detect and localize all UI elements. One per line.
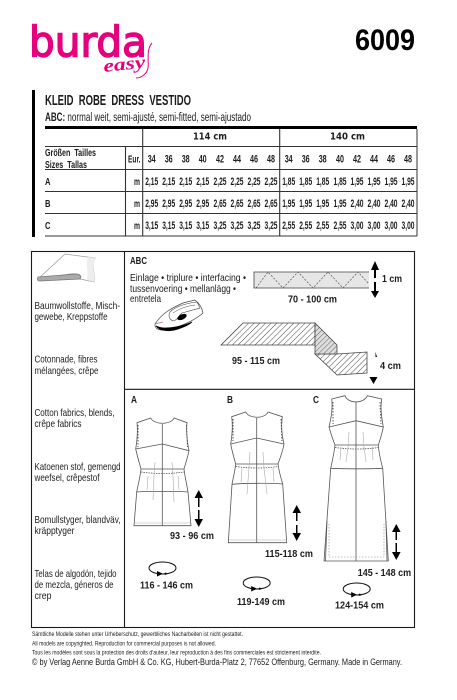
fabric recommendations: crep: [34, 591, 52, 602]
row C: 3,25: [230, 220, 244, 232]
dress A: A: [131, 394, 137, 406]
dress B: B: [227, 394, 233, 406]
yardage table: [45, 126, 417, 236]
interfacing strip diagram: [254, 272, 369, 288]
bias tape diagram: [221, 323, 367, 375]
copyright notice: Sämtliche Modelle stehen unter Urheberschutz, gewerbliches Nacharbeiten ist nicht gestattet.: [32, 631, 243, 638]
fabric recommendations: Cotonnade, fibres: [34, 354, 98, 366]
dress B: [227, 394, 287, 543]
size row: 42: [353, 154, 361, 166]
fabric recommendations: [34, 301, 121, 602]
arrow: B length: [292, 505, 301, 541]
row A: 2,25: [248, 176, 260, 188]
row B: 1,95: [299, 198, 312, 210]
size row: 36: [165, 154, 173, 166]
row C: 2,55: [334, 220, 346, 232]
fabric recommendations: weefsel, crêpestof: [34, 473, 100, 484]
row A: [45, 176, 414, 188]
fabric recommendations: Baumwollstoffe, Misch-: [34, 301, 120, 312]
size row: 48: [267, 154, 275, 166]
title: KLEID ROBE DRESS VESTIDO: [45, 92, 191, 109]
row A: 2,15: [196, 176, 209, 188]
row B: 2,65: [264, 198, 278, 210]
row B: 2,40: [350, 198, 364, 210]
icon: C hip circumference: [343, 583, 370, 598]
row B: 2,95: [145, 198, 158, 210]
row C: 3,15: [179, 220, 192, 232]
row B: 2,65: [214, 198, 226, 210]
row C: C: [45, 220, 51, 232]
logo: burda easy: easy: [102, 52, 148, 76]
size labels: Eur.: [128, 154, 141, 166]
row B: m: [134, 198, 140, 210]
label: A length: 93 - 96 cm: [170, 531, 214, 542]
size row: 38: [319, 154, 327, 166]
size row: 34: [148, 154, 156, 166]
size row: 48: [404, 154, 412, 166]
row A: 2,15: [162, 176, 175, 188]
row A: 2,25: [214, 176, 226, 188]
size row: 44: [233, 154, 242, 166]
size row: 40: [336, 154, 344, 166]
copyright notice: [32, 631, 402, 667]
interfacing text: tussenvoering • mellanlägg •: [130, 284, 236, 295]
interfacing text: [130, 273, 246, 305]
row C: 3,00: [402, 220, 414, 232]
row B: 1,95: [316, 198, 329, 210]
row B: 2,40: [368, 198, 380, 210]
row B: 2,65: [248, 198, 260, 210]
row B: B: [45, 198, 51, 210]
row A: 1,85: [316, 176, 329, 188]
copyright notice: Tous les modèles sont sous la protection des droits d'auteur, leur reproduction à des fins commerciales est strictement interdite.: [32, 650, 321, 657]
row C: 3,15: [162, 220, 175, 232]
lower panel frame: [32, 252, 414, 628]
label: 95 - 115 cm: 95 - 115 cm: [232, 356, 280, 367]
dress C: [313, 394, 388, 561]
fabric recommendations: gewebe, Kreppstoffe: [34, 312, 108, 323]
row C: 2,55: [282, 220, 295, 232]
size row: 38: [182, 154, 190, 166]
label: A hip: 116 - 146 cm: [140, 581, 193, 592]
row C: 3,15: [145, 220, 158, 232]
label: B hip: 119-149 cm: [237, 597, 285, 608]
row B: [45, 198, 414, 210]
size row: 46: [250, 154, 258, 166]
row B: 2,95: [179, 198, 192, 210]
label: B length: 115-118 cm: [265, 549, 313, 560]
row A: 2,15: [145, 176, 158, 188]
row A: m: [134, 176, 140, 188]
row A: 1,95: [368, 176, 380, 188]
fabric recommendations: kräpptyger: [34, 526, 75, 537]
row B: 2,95: [162, 198, 175, 210]
icon: B hip circumference: [243, 577, 270, 592]
size labels: Größen Tailles: [45, 147, 96, 159]
row A: A: [45, 176, 51, 188]
fabric recommendations: Cotton fabrics, blends,: [34, 408, 114, 419]
row C: 3,25: [214, 220, 226, 232]
copyright notice: All models are copyrighted. Reproduction for commercial purposes is not allowed.: [32, 640, 216, 648]
size labels: [45, 147, 141, 171]
label: 70 - 100 cm: 70 - 100 cm: [288, 294, 337, 306]
dress C: C: [313, 394, 319, 406]
label: 4 cm: 4 cm: [380, 361, 401, 372]
row B: 1,95: [282, 198, 295, 210]
stitching: [233, 419, 282, 441]
row C: 3,25: [248, 220, 260, 232]
fabric recommendations: mélangées, crêpe: [34, 366, 99, 377]
row C: 2,55: [299, 220, 312, 232]
row A: 1,85: [334, 176, 346, 188]
fabric recommendations: Bomullstyger, blandväv,: [34, 515, 120, 526]
row B: 2,40: [384, 198, 398, 210]
interfacing heading: ABC: [130, 255, 147, 267]
row C: 3,00: [368, 220, 380, 232]
size labels: Sizes Tallas: [45, 159, 87, 171]
pattern number: 6009: [355, 24, 415, 57]
row B: 2,65: [230, 198, 244, 210]
table width headers: 140 cm: [330, 132, 365, 142]
label: C length: 145 - 148 cm: [358, 568, 411, 579]
size row: 40: [199, 154, 207, 166]
fabric recommendations: Katoenen stof, gemengd: [34, 462, 121, 473]
fabric recommendations: crêpe fabrics: [34, 419, 82, 430]
row C: 3,25: [264, 220, 278, 232]
row C: 2,55: [316, 220, 329, 232]
fabric recommendations: Telas de algodón, tejido: [34, 569, 117, 580]
row A: 1,85: [299, 176, 312, 188]
size row: 46: [387, 154, 395, 166]
interfacing text: Einlage • triplure • interfacing •: [130, 273, 246, 284]
size row: [148, 154, 412, 166]
arrow: 1 cm: [371, 261, 379, 298]
row C: [45, 220, 414, 232]
arrow: A length: [194, 490, 203, 527]
row C: 3,00: [350, 220, 364, 232]
row C: 3,15: [196, 220, 209, 232]
stitching: [138, 425, 188, 447]
row A: 2,25: [264, 176, 278, 188]
label: C hip: 124-154 cm: [335, 601, 384, 612]
row A: 2,15: [179, 176, 192, 188]
row A: 1,85: [282, 176, 295, 188]
row A: 2,25: [230, 176, 244, 188]
size row: 34: [285, 154, 293, 166]
row C: m: [134, 220, 140, 232]
size row: 44: [370, 154, 379, 166]
size row: 36: [302, 154, 310, 166]
table width headers: 114 cm: [193, 132, 227, 142]
left black bar: [32, 90, 35, 237]
table width headers: [193, 132, 365, 142]
fabric recommendations: de mezcla, géneros de: [34, 580, 114, 591]
interfacing text: entretela: [130, 294, 161, 305]
row C: 3,00: [384, 220, 398, 232]
dress A: [131, 394, 191, 526]
icon: iron: [155, 300, 203, 331]
icon: folded fabric: [37, 254, 95, 282]
subtitle: ABC: normal weit, semi-ajusté, semi-fitted, semi-ajustado: [45, 112, 251, 124]
row B: 2,95: [196, 198, 209, 210]
row A: 1,95: [402, 176, 414, 188]
arrow: C length: [392, 524, 401, 560]
arrow: 4 cm: [370, 352, 378, 384]
icon: A hip circumference: [149, 562, 176, 576]
stitching: [333, 402, 381, 424]
logo: burda easy: burda: [29, 18, 147, 66]
row B: 1,95: [334, 198, 346, 210]
row A: 1,95: [384, 176, 398, 188]
row B: 2,40: [402, 198, 414, 210]
size row: 42: [216, 154, 224, 166]
label: 1 cm: 1 cm: [382, 274, 402, 285]
row A: 1,95: [350, 176, 364, 188]
